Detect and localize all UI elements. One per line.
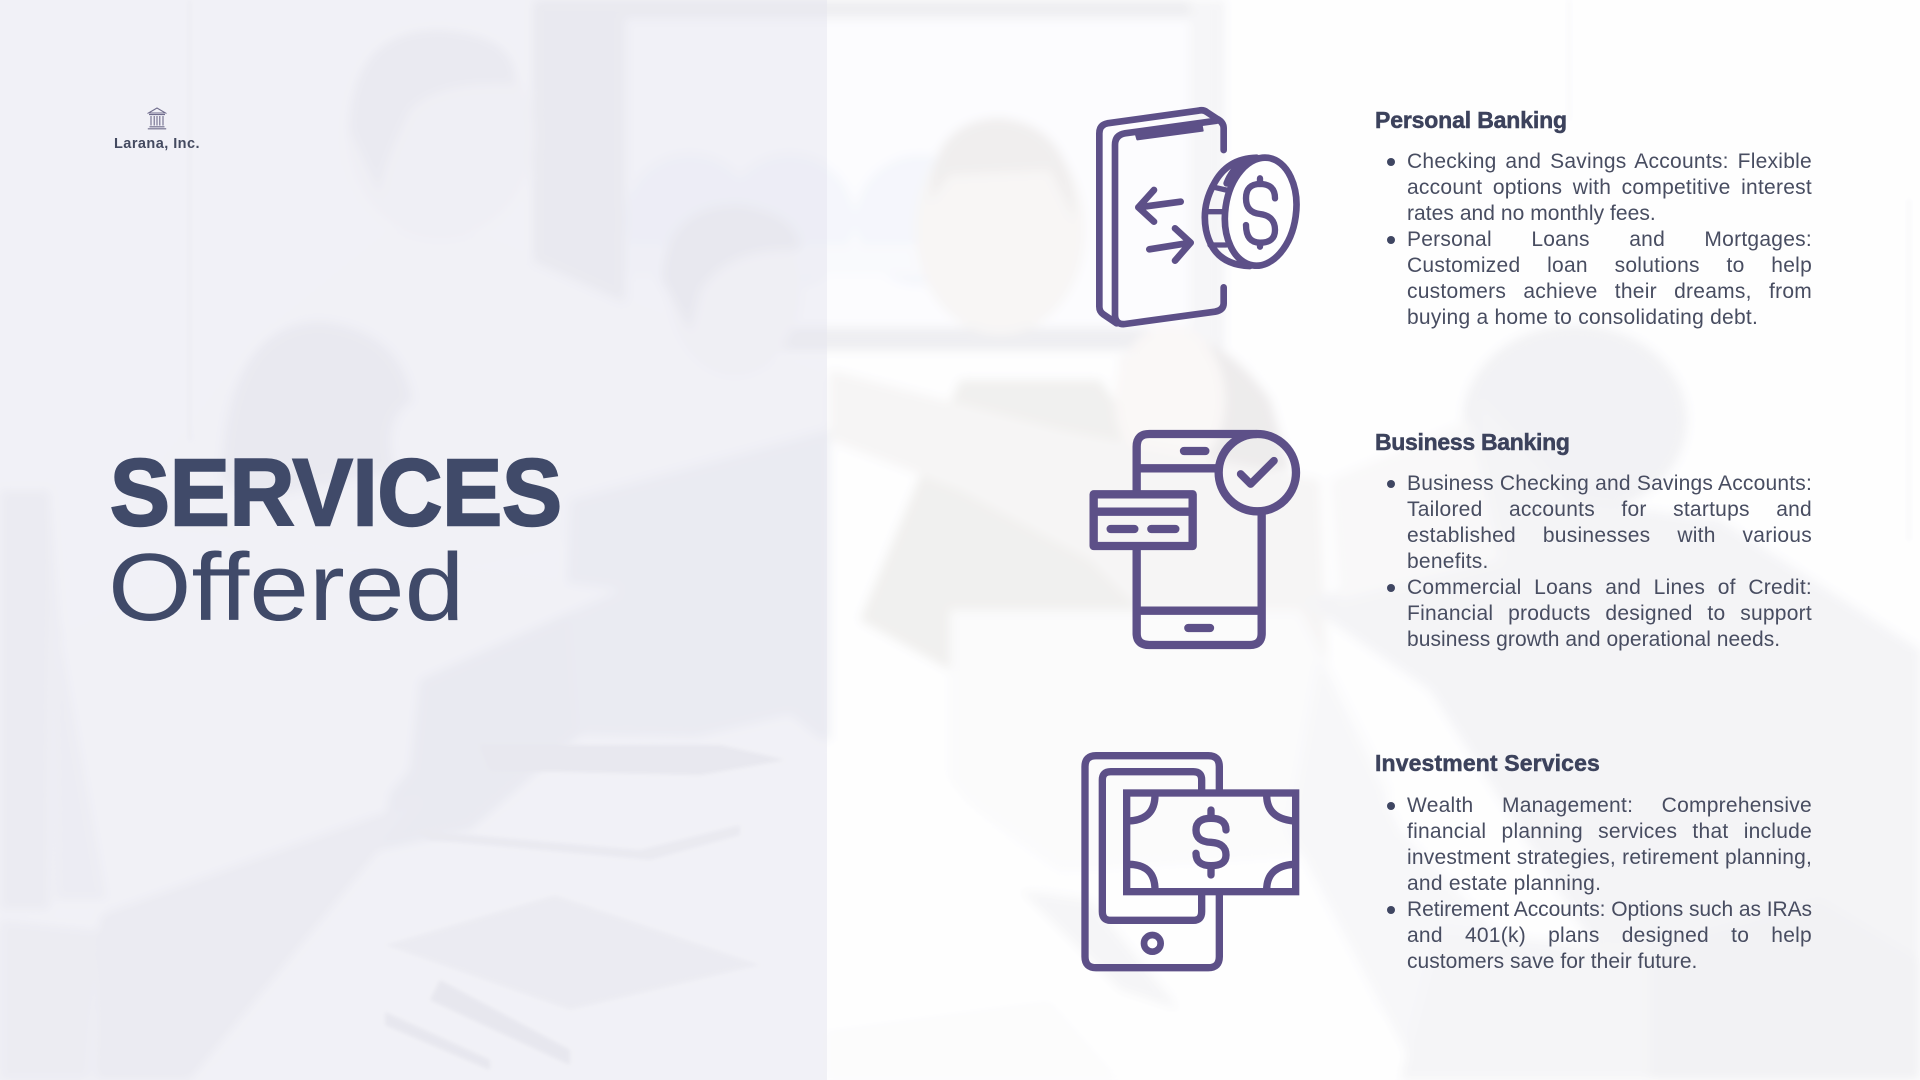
list: personal banking services: buying a home to consolidating debt. — [1407, 306, 1758, 329]
list: business banking services: Business Checking and Savings Accounts: — [1407, 472, 1812, 495]
woman shirt — [60, 540, 620, 920]
dark jacket — [560, 430, 830, 740]
list: personal banking services — [1387, 150, 1812, 329]
list: business banking services: Financial products designed to support — [1407, 602, 1812, 625]
panel: personal banking — [1375, 107, 1812, 329]
heading: business banking: Business Banking — [1375, 429, 1570, 455]
man right cap and back — [1463, 325, 1687, 515]
logo — [114, 108, 200, 152]
man centre-right face — [915, 125, 1085, 335]
man 1 head — [345, 30, 535, 240]
list: personal banking services: Checking and Savings Accounts: Flexible — [1407, 150, 1812, 173]
list: personal banking services: Personal Loans and Mortgages: — [1407, 228, 1812, 251]
panel: business banking — [1375, 429, 1812, 651]
heading: personal banking: Personal Banking — [1375, 107, 1567, 133]
icon: phone with banknote — [1081, 752, 1300, 972]
list: investment services: financial planning services that include — [1407, 820, 1812, 843]
list: investment services — [1387, 794, 1812, 973]
woman hair — [222, 322, 412, 500]
sleeve patterned — [830, 370, 1330, 760]
list: business banking services: business growth and operational needs. — [1407, 628, 1780, 651]
icon: phone with card and check — [1090, 430, 1300, 650]
shirt and arms — [120, 210, 830, 560]
laptop and table — [950, 610, 1390, 870]
left translucent panel — [0, 0, 827, 1080]
list: investment services: and estate planning. — [1407, 872, 1601, 895]
list: personal banking services: customers achieve their dreams, from — [1407, 280, 1812, 303]
list: business banking services: Tailored accounts for startups and — [1407, 498, 1812, 521]
man 2 head — [670, 205, 800, 375]
list: personal banking services: account options with competitive interest — [1407, 176, 1812, 199]
list: investment services: and 401(k) plans designed to help — [1407, 924, 1812, 947]
icon: phone with coin transfer — [1096, 106, 1300, 328]
panel: investment services — [1375, 750, 1812, 973]
pants — [95, 800, 420, 1080]
list: investment services: investment strategies, retirement planning, — [1407, 846, 1812, 869]
title line 2: Offered — [108, 534, 464, 641]
heading: investment services: Investment Services — [1375, 750, 1600, 776]
left table — [190, 715, 827, 1080]
list: business banking services: benefits. — [1407, 550, 1489, 573]
woman centre — [1120, 338, 1290, 470]
left chair — [0, 490, 50, 910]
list: business banking services — [1387, 472, 1812, 651]
list: personal banking services: Customized loan solutions to help — [1407, 254, 1812, 277]
list: business banking services: established businesses with various — [1407, 524, 1812, 547]
list: investment services: customers save for their future. — [1407, 950, 1697, 973]
list: business banking services: Commercial Loans and Lines of Credit: — [1407, 576, 1812, 599]
title — [108, 440, 562, 641]
icon: bank building — [147, 108, 167, 130]
title line 1: SERVICES — [110, 440, 562, 546]
list: investment services: Wealth Management: Comprehensive — [1407, 794, 1812, 817]
company name: Larana, Inc. — [114, 136, 200, 152]
list: investment services: Retirement Accounts: Options such as IRAs — [1407, 898, 1812, 921]
list: personal banking services: rates and no monthly fees. — [1407, 202, 1656, 225]
